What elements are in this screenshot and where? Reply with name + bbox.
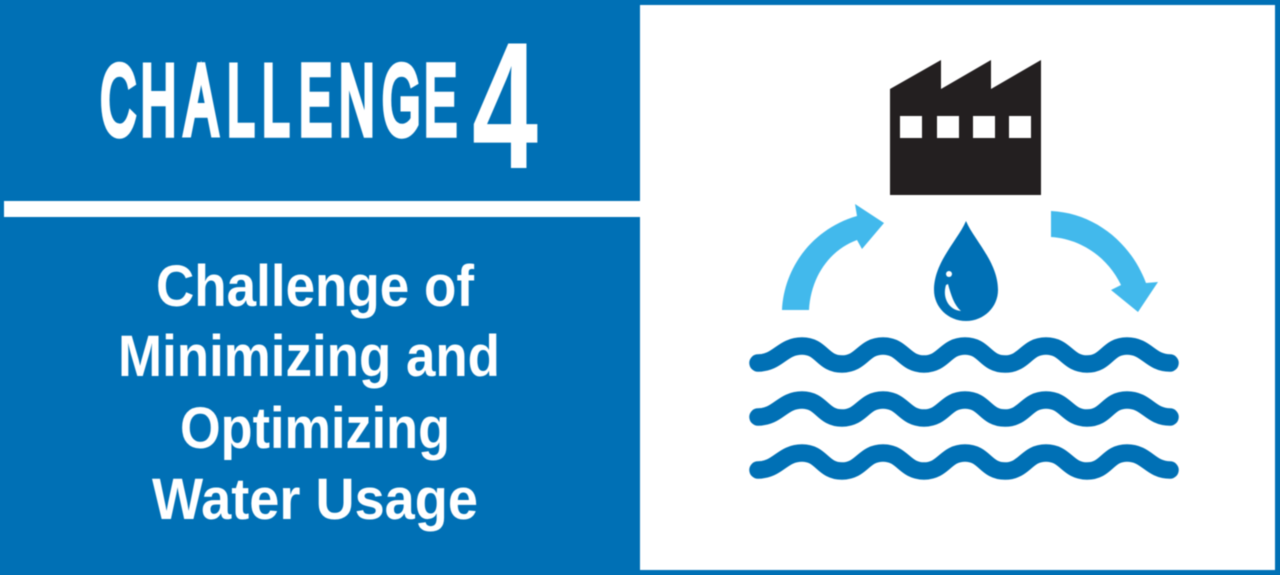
title: challenge: CHALLENGE bbox=[100, 47, 457, 156]
subtitle text: Water Usage bbox=[152, 467, 478, 532]
subtitle text bbox=[118, 254, 500, 532]
divider bar bbox=[4, 201, 640, 217]
icon: right curved arrow bbox=[1051, 211, 1158, 312]
icon: left curved arrow bbox=[782, 204, 884, 310]
icon: water waves bbox=[758, 346, 1170, 471]
subtitle text: Optimizing bbox=[180, 396, 450, 461]
icon: water drop bbox=[934, 221, 998, 321]
icon: factory bbox=[890, 60, 1041, 195]
subtitle text: Challenge of bbox=[156, 254, 475, 319]
panel: illustration bbox=[640, 5, 1275, 570]
subtitle text: Minimizing and bbox=[118, 324, 500, 389]
title: number 4: 4 bbox=[472, 5, 538, 207]
